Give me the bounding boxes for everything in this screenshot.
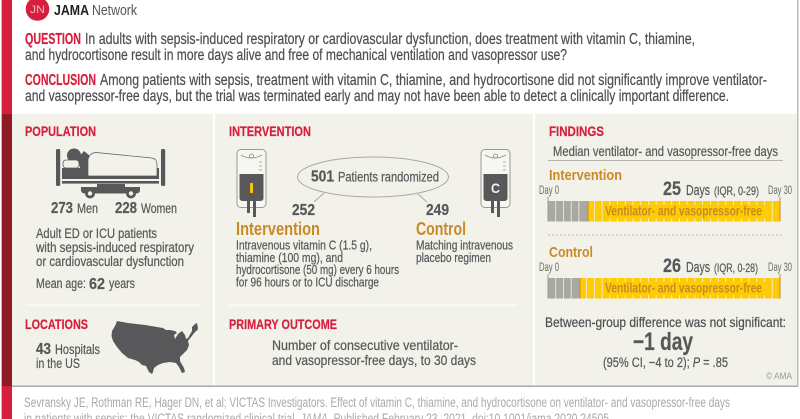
bar chart: control: Days bbox=[686, 259, 710, 276]
bar chart: intervention: 25 bbox=[663, 179, 681, 200]
mean age bbox=[36, 276, 135, 293]
intervention arm: Intervention bbox=[236, 219, 320, 239]
stat: men and women: Women bbox=[141, 201, 177, 216]
icon: IV bag control bbox=[481, 150, 510, 217]
intervention arm: for 96 hours or to ICU discharge bbox=[236, 274, 379, 290]
population description: Adult ED or ICU patients bbox=[36, 226, 157, 241]
panel: findings bbox=[539, 124, 792, 381]
icon: hospital bed bbox=[56, 148, 165, 198]
panel: primary outcome bbox=[229, 317, 476, 368]
population description: with sepsis-induced respiratory bbox=[35, 240, 194, 255]
bar chart: intervention: Intervention bbox=[549, 167, 622, 184]
logo: JAMA Network: JAMA bbox=[54, 2, 89, 19]
bar chart: control: (IQR, 0-28) bbox=[714, 261, 758, 275]
bar chart: intervention: (IQR, 0-29) bbox=[714, 184, 759, 198]
mean age: Mean age: bbox=[36, 276, 86, 291]
callout: patients randomized: Patients randomized bbox=[338, 168, 439, 184]
control arm: placebo regimen bbox=[416, 250, 491, 265]
bar chart: control: 26 bbox=[663, 256, 681, 277]
bar chart: intervention bbox=[539, 167, 792, 222]
outcome description: and vasopressor-free days, to 30 days bbox=[272, 352, 476, 368]
outcome description: Number of consecutive ventilator- bbox=[272, 337, 458, 353]
bar chart: control: Control bbox=[549, 244, 593, 261]
bar chart: intervention: Day 0 bbox=[539, 185, 559, 197]
logo: JAMA Network: JN bbox=[30, 4, 45, 16]
conclusion text block: CONCLUSION bbox=[25, 72, 96, 89]
between-group result: (95% CI, −4 to 2); P = .85 bbox=[603, 355, 728, 370]
callout: patients randomized bbox=[298, 157, 448, 202]
hospitals count bbox=[36, 341, 100, 371]
bar chart: intervention: Days bbox=[686, 182, 710, 199]
callout: patients randomized: 501 bbox=[311, 168, 334, 186]
question text block: and hydrocortisone result in more days alive and free of mechanical ventilation and vasopressor use? bbox=[25, 47, 567, 64]
stat: men and women: Men bbox=[77, 201, 98, 216]
panel: locations bbox=[25, 317, 198, 374]
heading: findings: FINDINGS bbox=[549, 124, 604, 139]
stat: men and women: 228 bbox=[115, 200, 137, 217]
copyright: © AMA bbox=[766, 371, 792, 381]
intervention arm: thiamine (100 mg), and bbox=[236, 250, 343, 265]
control arm bbox=[416, 219, 513, 265]
control arm: Control bbox=[416, 219, 466, 239]
intervention arm: Intravenous vitamin C (1.5 g), bbox=[236, 238, 372, 252]
mean age: 62 bbox=[89, 276, 105, 293]
heading: locations: LOCATIONS bbox=[25, 317, 88, 332]
question text block bbox=[25, 31, 695, 64]
hospitals count: 43 bbox=[36, 341, 51, 358]
bar chart: control: Day 0 bbox=[539, 262, 559, 274]
stat: men and women bbox=[51, 200, 177, 217]
hospitals count: in the US bbox=[36, 356, 80, 371]
citation bbox=[24, 395, 730, 419]
control arm: Matching intravenous bbox=[416, 238, 513, 252]
heading: population: POPULATION bbox=[25, 124, 96, 139]
icon: IV bag control: C bbox=[491, 180, 500, 196]
population description: or cardiovascular dysfunction bbox=[36, 254, 184, 269]
between-group result bbox=[545, 314, 786, 370]
logo: JAMA Network: Network bbox=[92, 2, 137, 19]
stat: 249: 249 bbox=[426, 202, 449, 219]
bar chart: control bbox=[539, 244, 792, 298]
intervention arm bbox=[236, 219, 399, 290]
panel: population bbox=[25, 124, 194, 293]
stat: men and women: 273 bbox=[51, 200, 73, 217]
conclusion text block bbox=[25, 72, 767, 105]
question text block: QUESTION bbox=[25, 31, 81, 48]
stat: 252: 252 bbox=[292, 202, 315, 219]
heading: primary outcome: PRIMARY OUTCOME bbox=[229, 317, 337, 332]
outcome description bbox=[272, 337, 476, 368]
between-group result: −1 day bbox=[633, 328, 693, 356]
logo: JAMA Network bbox=[26, 0, 137, 21]
population description bbox=[35, 226, 194, 269]
heading: intervention: INTERVENTION bbox=[229, 124, 311, 139]
panel: intervention bbox=[229, 124, 513, 290]
icon: IV bag intervention bbox=[237, 150, 266, 217]
panel backgrounds bbox=[12, 114, 798, 387]
mean age: years bbox=[109, 276, 135, 291]
icon: map of the US bbox=[112, 321, 198, 374]
intervention arm: hydrocortisone (50 mg) every 6 hours bbox=[236, 262, 399, 277]
hospitals count: Hospitals bbox=[55, 342, 100, 357]
